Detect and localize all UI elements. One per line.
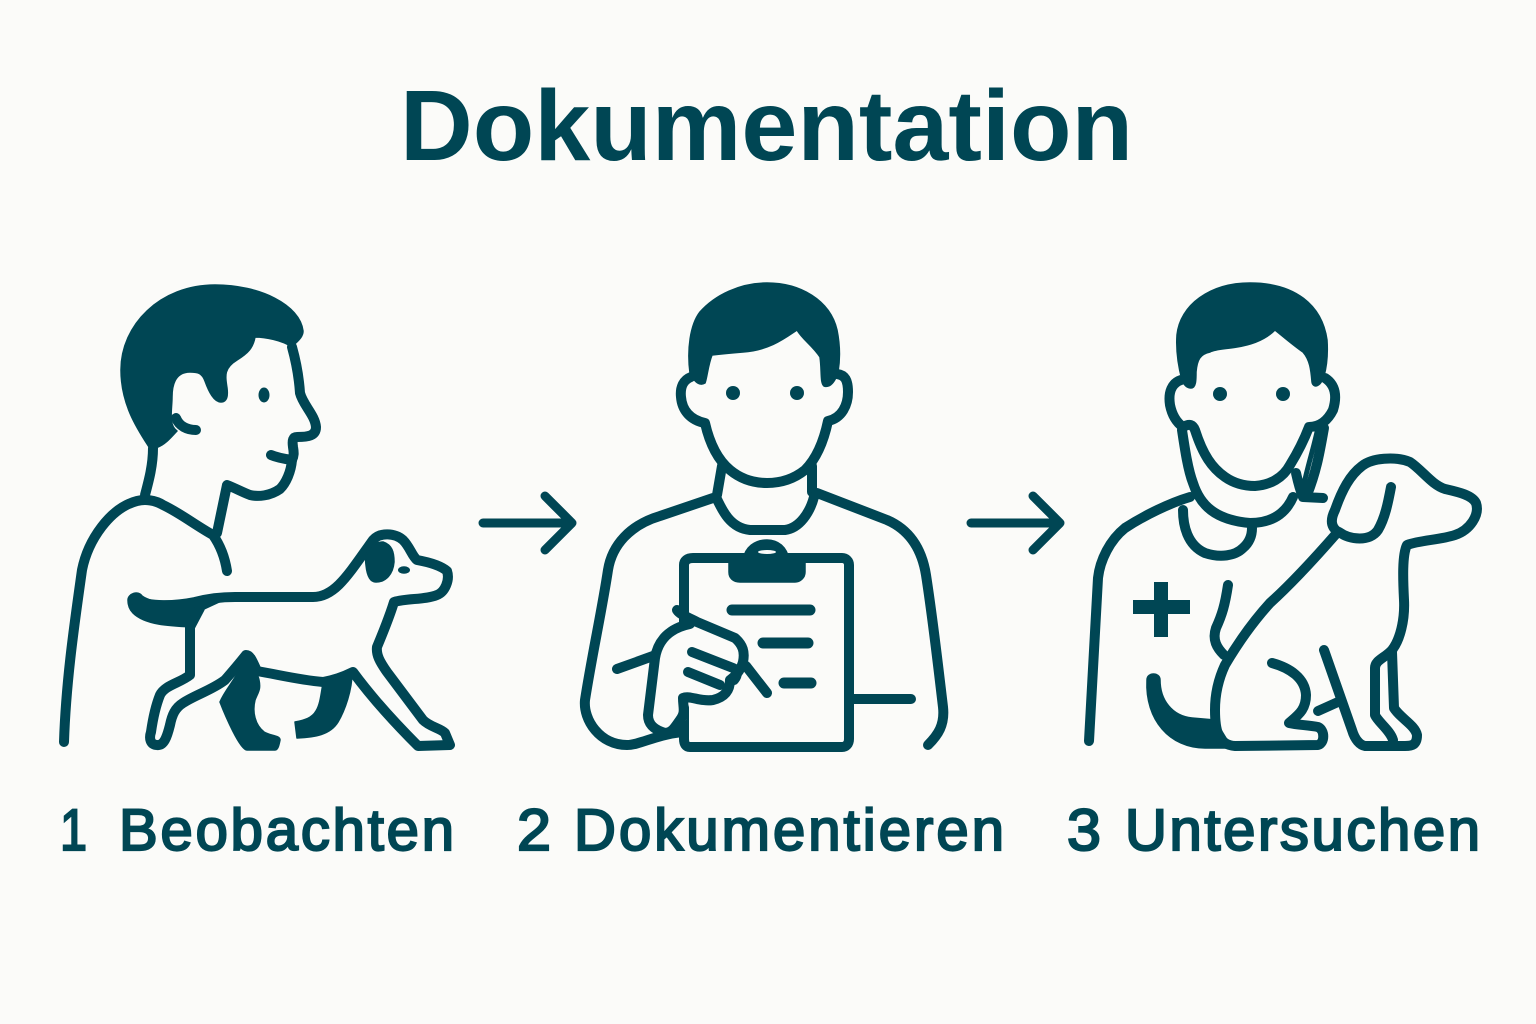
label: step 1: 1 bbox=[60, 798, 87, 863]
icon: walking dog bbox=[128, 534, 450, 750]
label: step 3: 3 bbox=[1067, 798, 1101, 863]
icon: person in profile bbox=[64, 285, 316, 742]
title: Dokumentation bbox=[400, 70, 1133, 182]
label: step 3: Untersuchen bbox=[1125, 798, 1480, 863]
label: step 1: Beobachten bbox=[119, 798, 454, 863]
icon: sitting dog bbox=[1147, 459, 1477, 748]
panel: step 1 observing bbox=[64, 285, 450, 750]
panel: step 3 examining bbox=[1089, 283, 1477, 748]
icon: clipboard bbox=[684, 540, 911, 747]
label: step 2: Dokumentieren bbox=[574, 798, 1004, 863]
label: step 2: 2 bbox=[517, 798, 551, 863]
text lines on clipboard bbox=[732, 610, 811, 683]
icon: person front view bbox=[585, 283, 943, 745]
icon: medical cross bbox=[1133, 582, 1190, 637]
icon: hand with pen bbox=[617, 610, 767, 733]
arrow: step 2 to 3 bbox=[971, 496, 1060, 550]
arrow: step 1 to 2 bbox=[483, 496, 572, 550]
icon: vet with stethoscope bbox=[1089, 283, 1335, 741]
panel: step 2 documenting bbox=[585, 283, 943, 747]
